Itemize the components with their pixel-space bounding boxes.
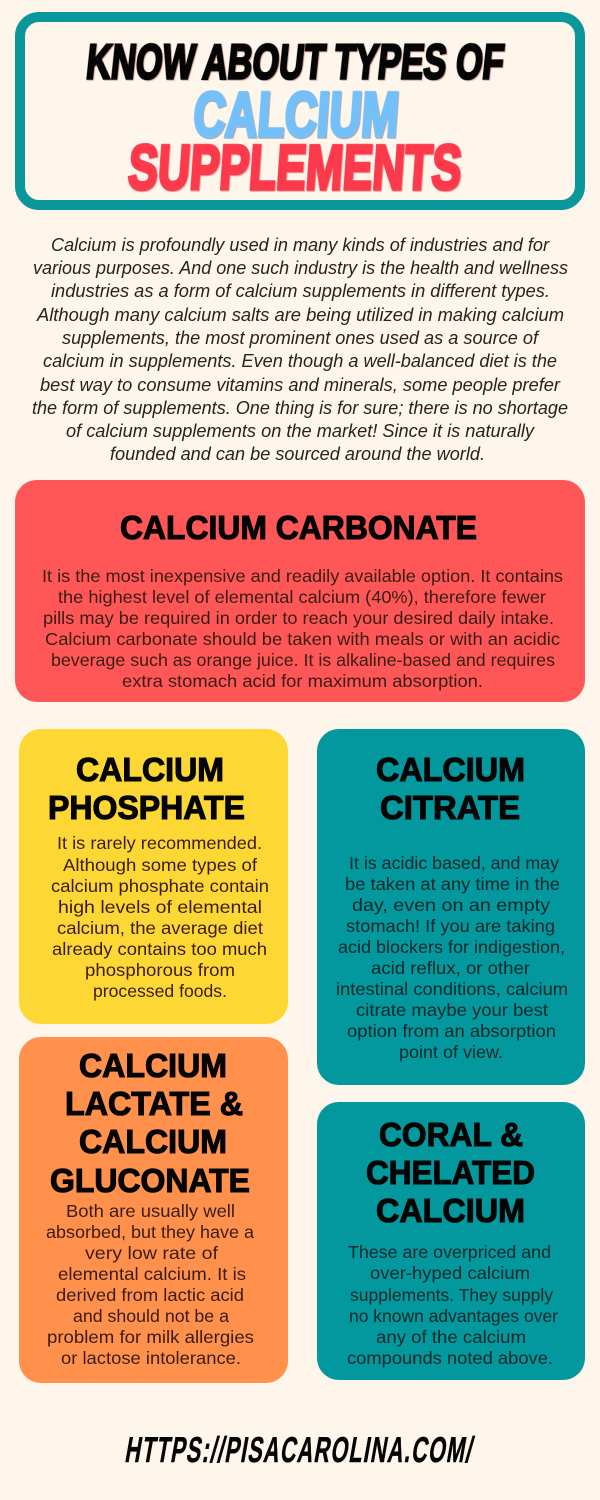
body: calcium carbonate: Calcium carbonate should be taken with meals or with an acidic [45,629,560,649]
intro paragraph: the form of supplements. One thing is for sure; there is no shortage [32,398,568,418]
heading: coral and chelated calcium [366,1116,535,1229]
heading: calcium phosphate: CALCIUM [76,751,224,788]
body: coral and chelated calcium: supplements. They supply [350,1285,553,1305]
body: calcium lactate and gluconate: Both are usually well [66,1201,235,1221]
heading: calcium lactate and gluconate: CALCIUM [79,1047,227,1084]
panel: calcium phosphate [19,729,288,1024]
panel: calcium lactate and gluconate [19,1037,288,1383]
body: calcium citrate: intestinal conditions, calcium [336,979,568,999]
panel: calcium carbonate [15,480,585,702]
body: calcium lactate and gluconate [46,1201,254,1368]
body: calcium phosphate: high levels of elemental [58,897,262,917]
intro paragraph: various purposes. And one such industry is the health and wellness [33,258,568,278]
body: calcium carbonate: It is the most inexpensive and readily available option. It contains [42,566,563,586]
heading: coral and chelated calcium: CHELATED [366,1154,535,1191]
heading: calcium phosphate: PHOSPHATE [48,789,245,826]
intro paragraph: best way to consume vitamins and minerals, some people prefer [40,375,561,395]
heading: coral and chelated calcium: CORAL & [379,1116,523,1153]
body: calcium carbonate [42,566,563,691]
body: calcium lactate and gluconate: or lactose intolerance. [61,1348,241,1368]
intro paragraph: founded and can be sourced around the world. [110,444,485,464]
body: calcium citrate: day, even on an empty [352,895,550,915]
intro paragraph [32,235,568,464]
heading: coral and chelated calcium: CALCIUM [376,1192,525,1229]
body: calcium carbonate: pills may be required in order to reach your desired daily intake. [43,608,554,628]
body: calcium lactate and gluconate: and should not be a [73,1306,229,1326]
body: calcium lactate and gluconate: elemental calcium. It is [58,1264,246,1284]
body: calcium phosphate: Although some types of [63,855,257,875]
body: coral and chelated calcium: no known advantages over [349,1306,558,1326]
body: coral and chelated calcium: over-hyped calcium [370,1263,530,1283]
intro paragraph: Although many calcium salts are being utilized in making calcium [36,305,564,325]
heading: calcium citrate [376,751,525,826]
body: calcium phosphate: phosphorous from [85,960,235,980]
body: coral and chelated calcium: These are overpriced and [348,1242,551,1262]
heading: calcium citrate: CALCIUM [376,751,525,788]
body: calcium lactate and gluconate: absorbed, but they have a [46,1222,254,1242]
body: calcium phosphate [51,833,269,1001]
panel: calcium citrate [317,729,585,1085]
body: calcium lactate and gluconate: very low rate of [85,1243,218,1263]
body: calcium citrate: stomach! If you are taking [346,916,555,936]
body: calcium citrate: acid blockers for indigestion, [338,937,565,957]
panel: coral and chelated calcium [317,1102,585,1380]
body: calcium citrate: citrate maybe your best [356,1000,548,1020]
intro paragraph: supplements, the most prominent ones used as a source of [62,328,540,348]
heading: calcium citrate: CITRATE [380,789,520,826]
body: calcium citrate: point of view. [399,1042,503,1062]
body: calcium carbonate: extra stomach acid for maximum absorption. [122,671,483,691]
body: calcium phosphate: already contains too much [52,939,267,959]
body: coral and chelated calcium: any of the calcium [376,1327,526,1347]
intro paragraph: Calcium is profoundly used in many kinds of industries and for [51,235,550,255]
body: calcium lactate and gluconate: problem for milk allergies [47,1327,254,1347]
heading: calcium phosphate [48,751,245,826]
body: calcium citrate: It is acidic based, and may [349,853,559,873]
body: calcium citrate [336,853,568,1062]
body: coral and chelated calcium [347,1242,558,1368]
body: calcium phosphate: processed foods. [93,981,227,1001]
body: calcium phosphate: It is rarely recommended. [57,833,262,853]
intro paragraph: calcium in supplements. Even though a well-balanced diet is the [43,351,557,371]
body: calcium citrate: acid reflux, or other [371,958,530,978]
title panel [20,17,580,205]
heading: calcium carbonate: CALCIUM CARBONATE [120,509,477,546]
intro paragraph: of calcium supplements on the market! Since it is naturally [66,421,535,441]
heading: calcium lactate and gluconate: CALCIUM [79,1123,227,1160]
title line: supplements: SUPPLEMENTS [126,133,464,203]
intro paragraph: industries as a form of calcium supplements in different types. [51,281,550,301]
body: calcium carbonate: the highest level of elemental calcium (40%), therefore fewer [58,587,546,607]
heading: calcium lactate and gluconate [50,1047,250,1199]
body: calcium citrate: be taken at any time in the [345,874,560,894]
body: calcium lactate and gluconate: derived from lactic acid [56,1285,244,1305]
body: calcium carbonate: beverage such as orange juice. It is alkaline-based and requires [51,650,555,670]
body: calcium citrate: option from an absorption [347,1021,556,1041]
body: calcium phosphate: calcium phosphate contain [51,876,269,896]
heading: calcium lactate and gluconate: LACTATE & [65,1085,243,1122]
body: calcium phosphate: calcium, the average diet [57,918,263,938]
body: coral and chelated calcium: compounds noted above. [347,1348,553,1368]
heading: calcium lactate and gluconate: GLUCONATE [50,1162,250,1199]
title line: calcium: CALCIUM [191,80,401,150]
